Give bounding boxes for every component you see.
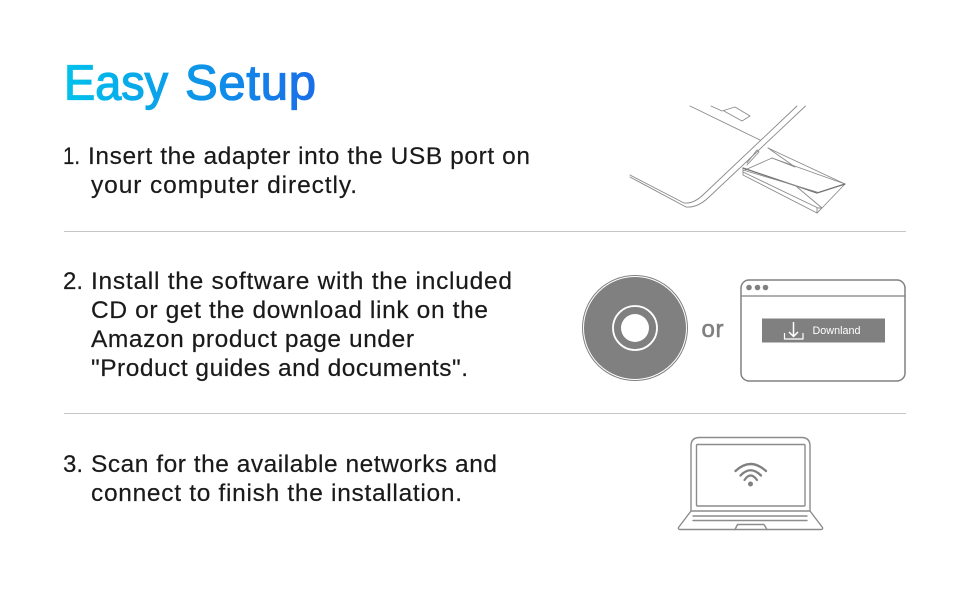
step 1 text: 1. bbox=[63, 143, 80, 170]
or label: or bbox=[702, 316, 724, 343]
title bbox=[64, 56, 316, 110]
step 2 text: CD or get the download link on the bbox=[91, 297, 488, 324]
step 3 text: Scan for the available networks and bbox=[91, 451, 497, 478]
step 2 text: 2. bbox=[63, 268, 83, 295]
step 1 text: Insert the adapter into the USB port on bbox=[88, 143, 530, 170]
icon: adapter plugged into computer bbox=[630, 106, 845, 213]
step 1 text bbox=[63, 143, 530, 199]
step 2 text: Amazon product page under bbox=[91, 326, 414, 353]
divider bbox=[64, 413, 906, 414]
title: Easy bbox=[64, 56, 168, 110]
icon: CD disc bbox=[582, 275, 688, 381]
icon: laptop with wifi bbox=[678, 438, 823, 530]
step 1 text: your computer directly. bbox=[91, 172, 357, 199]
step 2 text bbox=[63, 268, 512, 382]
icon: browser download window bbox=[741, 280, 905, 381]
icon: browser download window: Downland bbox=[812, 325, 860, 337]
step 3 text: connect to finish the installation. bbox=[91, 480, 462, 507]
title: Setup bbox=[185, 56, 316, 110]
step 2 text: "Product guides and documents". bbox=[91, 355, 468, 382]
step 3 text bbox=[63, 451, 497, 507]
step 3 text: 3. bbox=[63, 451, 83, 478]
step 2 text: Install the software with the included bbox=[91, 268, 512, 295]
divider bbox=[64, 231, 906, 232]
